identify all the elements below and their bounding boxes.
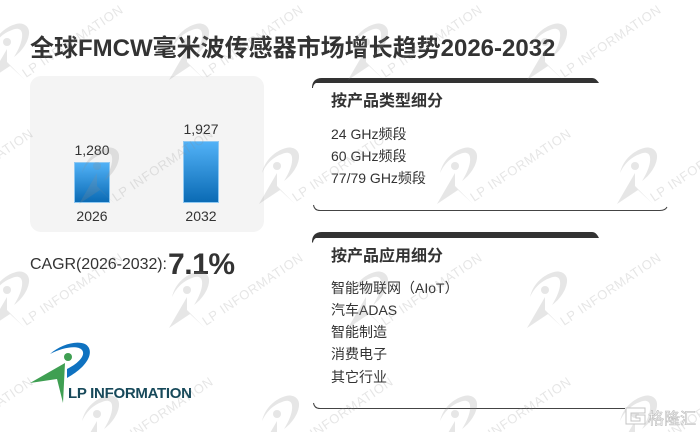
- watermarks: LP INFORMATION: [557, 250, 664, 328]
- panel: bar chart: [30, 76, 264, 232]
- CAGR: 7.1%: [168, 248, 235, 281]
- CAGR: [30, 248, 235, 281]
- bar 2032: 1,927: [183, 121, 219, 137]
- watermarks: LP INFORMATION: [289, 126, 396, 204]
- panel: applications: [312, 232, 625, 408]
- list: 24 GHz频段: [331, 126, 406, 142]
- bar 2026: 1,280: [74, 142, 110, 158]
- title: 全球FMCW毫米波传感器市场增长趋势2026-2032: [30, 34, 555, 62]
- bar 2026: [74, 142, 110, 224]
- logo: [30, 343, 192, 403]
- watermarks: LP INFORMATION: [199, 2, 306, 80]
- list: 其它行业: [331, 369, 387, 385]
- list: 消费电子: [331, 346, 387, 362]
- watermarks: LP INFORMATION: [19, 250, 126, 328]
- heading: 按产品类型细分: [331, 91, 443, 110]
- watermarks: LP INFORMATION: [19, 2, 126, 80]
- bar 2026: 2026: [76, 208, 108, 224]
- watermarks: LP INFORMATION: [378, 2, 485, 80]
- watermarks: LP INFORMATION: [109, 126, 216, 204]
- logo: LP INFORMATION: [68, 385, 192, 402]
- list: 智能物联网（AIoT）: [331, 280, 459, 296]
- corner brand mark: [626, 408, 696, 428]
- heading: 按产品应用细分: [331, 246, 443, 265]
- list: [331, 280, 459, 385]
- CAGR: CAGR(2026-2032):: [30, 256, 167, 273]
- list: 77/79 GHz频段: [331, 170, 426, 186]
- watermarks: LP INFORMATION: [557, 2, 664, 80]
- watermarks: LP INFORMATION: [378, 250, 485, 328]
- bar 2032: [183, 121, 219, 224]
- list: 汽车ADAS: [331, 302, 397, 318]
- panel: product types: [312, 78, 667, 210]
- corner brand mark: 格隆汇: [648, 410, 696, 428]
- list: 智能制造: [331, 324, 387, 340]
- bar 2032: 2032: [185, 208, 217, 224]
- list: [331, 126, 426, 186]
- list: 60 GHz频段: [331, 148, 406, 164]
- watermarks: LP INFORMATION: [467, 126, 574, 204]
- watermarks: LP INFORMATION: [199, 250, 306, 328]
